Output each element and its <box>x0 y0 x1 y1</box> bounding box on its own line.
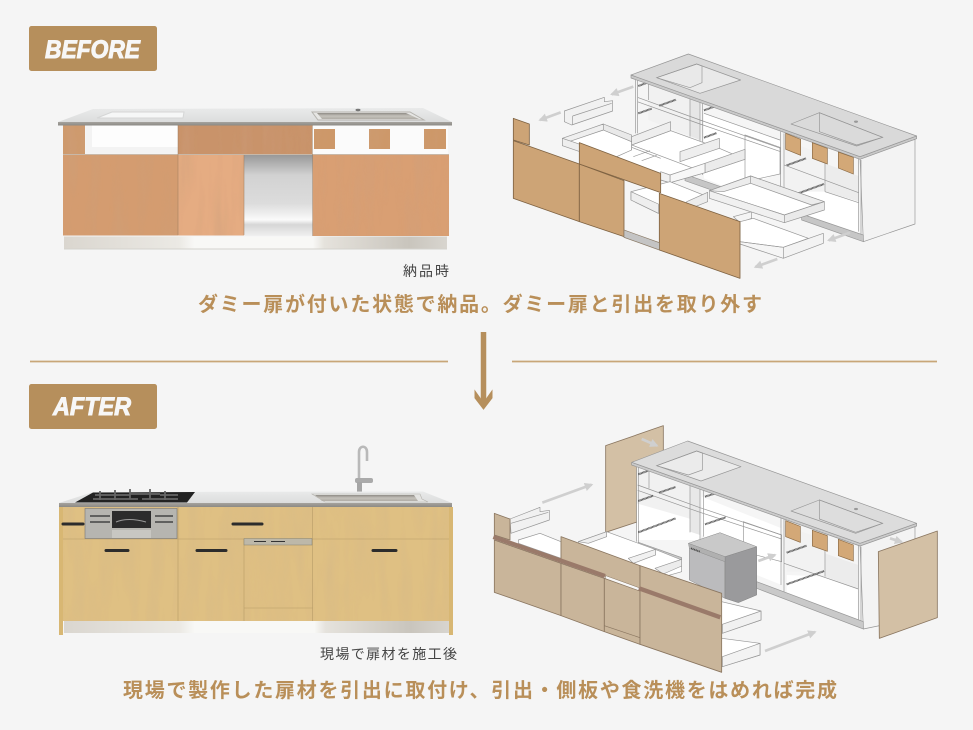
arrows <box>542 439 902 651</box>
drawer: upper centre <box>617 122 745 183</box>
drawer: large left <box>562 124 632 158</box>
heading: before description: ダミー扉が付いた状態で納品。ダミー扉と引出を取り外す <box>198 292 762 316</box>
dishwasher <box>688 533 757 603</box>
label: AFTER: AFTER <box>52 393 131 421</box>
divider lines <box>30 360 937 362</box>
label: AFTER <box>29 384 157 429</box>
drawer: bottom right <box>733 212 823 258</box>
faucet <box>355 447 373 492</box>
label: BEFORE <box>29 26 157 71</box>
back side panel <box>606 426 663 532</box>
dishwasher panel <box>244 538 312 545</box>
caption: 納品時: 納品時 <box>403 263 449 279</box>
hob <box>75 489 195 502</box>
exploded diagram: after <box>493 426 937 672</box>
cabinet body <box>637 465 915 629</box>
small door samples on cabinet <box>786 133 853 174</box>
door handle rails <box>493 537 720 617</box>
caption: 現場で扉材を施工後: 現場で扉材を施工後 <box>320 646 457 662</box>
drawers <box>510 507 761 667</box>
drawer: lower centre <box>631 182 708 213</box>
cabinet body <box>636 78 915 242</box>
dummy doors <box>513 118 740 278</box>
exploded diagram: before <box>513 54 917 278</box>
drawers <box>562 97 824 258</box>
drawer: front right <box>709 176 824 223</box>
oven panel <box>85 508 177 538</box>
right side panel <box>878 531 937 638</box>
countertop <box>631 54 917 159</box>
handles <box>63 524 396 550</box>
photo: finished kitchen <box>59 447 453 635</box>
arrows <box>540 87 850 267</box>
finished doors <box>494 513 722 672</box>
label: BEFORE: BEFORE <box>45 36 141 64</box>
small door samples on cabinet <box>786 521 853 561</box>
countertop <box>632 441 917 546</box>
photo: kitchen at delivery <box>58 108 452 250</box>
arrow: down <box>475 332 492 409</box>
heading: after description: 現場で製作した扉材を引出に取付け、引出・側板や食洗機をはめれば完成 <box>123 678 837 702</box>
